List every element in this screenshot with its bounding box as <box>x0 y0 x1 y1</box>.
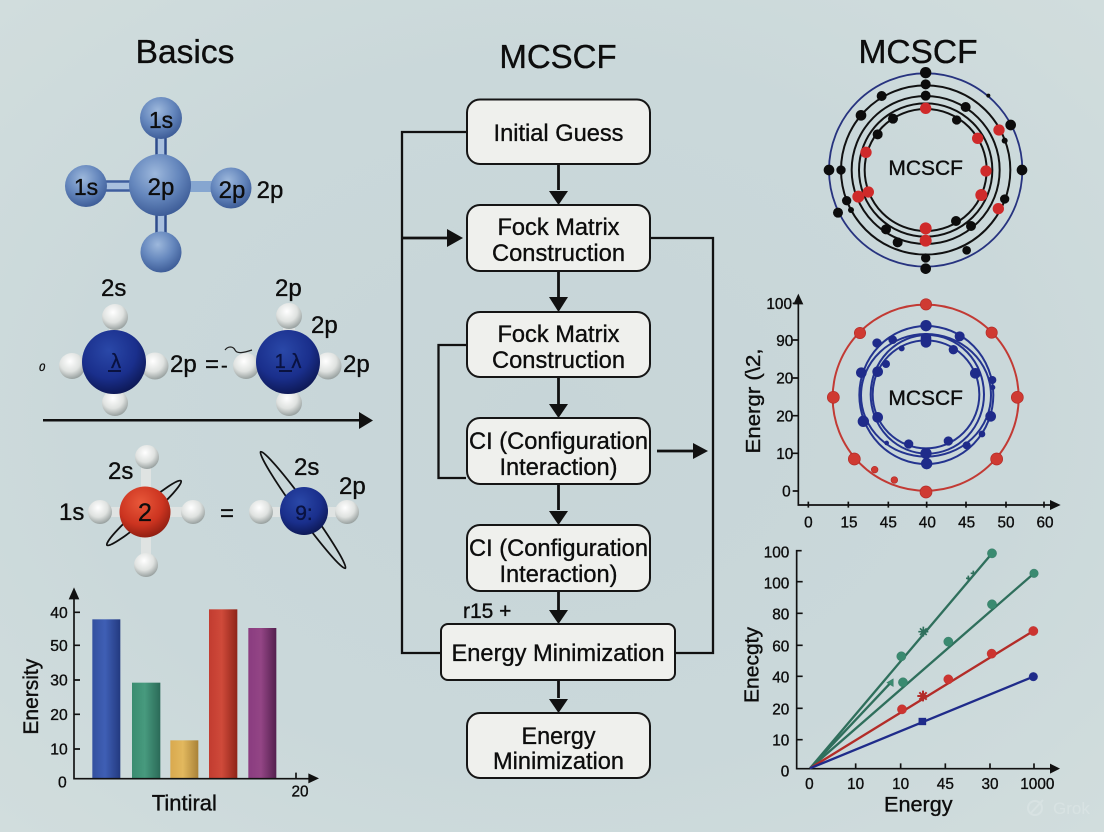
axis labels: 90 <box>776 333 793 350</box>
axis labels: Enersity <box>20 658 43 735</box>
flow box: Fock Matrix Construction: Construction <box>492 240 625 267</box>
axis labels: 15 <box>840 514 858 531</box>
axis labels: 100 <box>764 575 789 592</box>
axis labels: 20 <box>50 707 68 724</box>
ring chart: Energy axes with red and blue orbitals: MCSCF <box>888 387 963 410</box>
molecule: light blue cross: 2p <box>148 174 174 201</box>
flow box: Initial Guess <box>467 100 650 164</box>
flow box: Fock Matrix Construction: Fock Matrix <box>498 214 620 241</box>
axis labels: 50 <box>997 514 1015 531</box>
flow box: Energy Minimization: Minimization <box>493 748 624 775</box>
flow box: Energy Minimization wide: Energy Minimization <box>452 640 664 667</box>
axis labels: 0 <box>781 763 789 780</box>
bar chart: Enersity vs Tintiral <box>20 587 319 816</box>
molecule row: red sphere and blue sphere with lobes: 9: <box>295 502 313 525</box>
axis labels <box>742 296 1054 531</box>
ring diagram: MCSCF black and red orbitals <box>824 67 1027 274</box>
axis labels: 20 <box>776 371 793 388</box>
axis labels: 45 <box>937 776 954 793</box>
flow box: Fock Matrix Construction 2 <box>467 312 650 377</box>
molecule row: two dark blue spheres with white atoms: = <box>205 351 219 378</box>
heading: Basics: Basics <box>136 34 234 71</box>
arrow: horizontal divider <box>43 412 373 429</box>
molecule row: two dark blue spheres with white atoms: 2s <box>101 275 126 302</box>
flow box: CI Configuration Interaction 2 <box>467 525 650 591</box>
axis labels: 10 <box>776 446 793 463</box>
flow box: Fock Matrix Construction 2: Fock Matrix <box>498 321 620 348</box>
axis labels <box>20 605 309 816</box>
molecule row: red sphere and blue sphere with lobes: 2 <box>138 499 152 527</box>
axis labels: 10 <box>50 742 68 759</box>
molecule row: two dark blue spheres with white atoms: 2p <box>343 351 370 378</box>
watermark: Grok: Grok <box>1053 799 1090 818</box>
axis labels: 30 <box>981 776 999 793</box>
molecule row: two dark blue spheres with white atoms: 2p <box>275 275 302 302</box>
axis labels: 40 <box>772 669 789 686</box>
flowchart connectors <box>402 132 713 698</box>
molecule row: red sphere and blue sphere with lobes: 2s <box>294 454 319 481</box>
axis labels: 60 <box>1036 514 1054 531</box>
axis labels: 0 <box>782 484 791 501</box>
axis labels: 40 <box>50 605 68 622</box>
molecule: light blue cross: 1s <box>149 107 173 133</box>
molecule: light blue cross: 2p <box>219 177 245 204</box>
axis labels: 60 <box>772 638 789 655</box>
flowchart arrowheads <box>447 191 708 713</box>
axis labels: 0 <box>805 776 814 793</box>
axis labels: Energr (\2, <box>742 348 765 453</box>
axis labels: 1000 <box>1020 776 1054 793</box>
molecule row: red sphere and blue sphere with lobes: 2p <box>339 473 366 500</box>
axis labels: 45 <box>958 514 975 531</box>
ring chart: Energy axes with red and blue orbitals <box>742 294 1061 531</box>
bars <box>92 609 276 778</box>
flow box: Energy Minimization <box>467 713 650 778</box>
axis labels: 20 <box>291 784 309 801</box>
axis labels: 10 <box>772 733 789 750</box>
molecule: light blue cross <box>65 97 283 272</box>
axis labels <box>741 545 1054 817</box>
axis labels: 40 <box>919 514 936 531</box>
flow box: Initial Guess: Initial Guess <box>494 120 624 147</box>
axes <box>797 551 1060 774</box>
axis labels: 0 <box>58 774 67 791</box>
heading: MCSCF right column: MCSCF <box>858 34 978 71</box>
heading: MCSCF flowchart: MCSCF <box>499 38 617 75</box>
molecule row: red sphere and blue sphere with lobes: 2s <box>108 458 133 485</box>
axis labels: 80 <box>772 607 789 624</box>
blue series <box>810 672 1038 768</box>
watermark: Grok <box>1028 799 1090 818</box>
flow box: Fock Matrix Construction <box>467 205 650 271</box>
flow box: Energy Minimization wide <box>441 624 675 680</box>
flow box: CI Configuration Interaction 2: Interaction) <box>500 561 618 588</box>
molecule row: red sphere and blue sphere with lobes: = <box>220 500 234 527</box>
axis labels: 45 <box>880 514 897 531</box>
ring diagram: MCSCF black and red orbitals: MCSCF <box>888 157 963 180</box>
molecule row: two dark blue spheres with white atoms: 2p <box>170 351 197 378</box>
axis labels: 10 <box>847 776 864 793</box>
flow box: CI Configuration Interaction: Interaction) <box>500 454 618 481</box>
axis labels: 20 <box>772 701 789 718</box>
flow box: Energy Minimization: Energy <box>522 723 596 750</box>
molecule row: red sphere and blue sphere with lobes <box>59 445 366 577</box>
molecule row: red sphere and blue sphere with lobes: 1s <box>59 499 84 526</box>
axes <box>793 294 1061 510</box>
axis labels: Energy <box>884 792 953 817</box>
green series <box>810 549 1038 768</box>
molecule row: two dark blue spheres with white atoms: 1 λ <box>275 351 301 373</box>
axis labels: 20 <box>776 408 793 425</box>
axis labels: 100 <box>766 296 792 313</box>
red series <box>810 626 1038 768</box>
axis labels: Tintiral <box>152 791 217 816</box>
molecule row: two dark blue spheres with white atoms: λ <box>111 351 121 373</box>
axes <box>69 587 319 783</box>
molecule row: two dark blue spheres with white atoms: 2p <box>311 312 338 339</box>
axis labels: 30 <box>50 673 68 690</box>
molecule row: two dark blue spheres with white atoms <box>39 275 370 416</box>
flow box: CI Configuration Interaction 2: CI (Configuration <box>469 535 648 562</box>
axis labels: 100 <box>764 545 789 562</box>
flow box: CI Configuration Interaction: CI (Configuration <box>469 428 648 455</box>
flow box: Fock Matrix Construction 2: Construction <box>492 347 625 374</box>
flow label: r15 +: r15 + <box>463 600 511 623</box>
molecule: light blue cross: 1s <box>74 174 98 200</box>
molecule row: two dark blue spheres with white atoms: 0 <box>39 362 46 374</box>
molecule: light blue cross: 2p <box>257 177 283 204</box>
axis labels: 10 <box>892 776 909 793</box>
axis labels: 50 <box>50 638 68 655</box>
flow box: CI Configuration Interaction <box>467 418 650 484</box>
molecule row: two dark blue spheres with white atoms: - <box>221 355 228 377</box>
axis labels: 0 <box>804 514 813 531</box>
axis labels: Enecgty <box>741 626 764 703</box>
line chart: Enecgty vs Energy <box>741 545 1060 817</box>
